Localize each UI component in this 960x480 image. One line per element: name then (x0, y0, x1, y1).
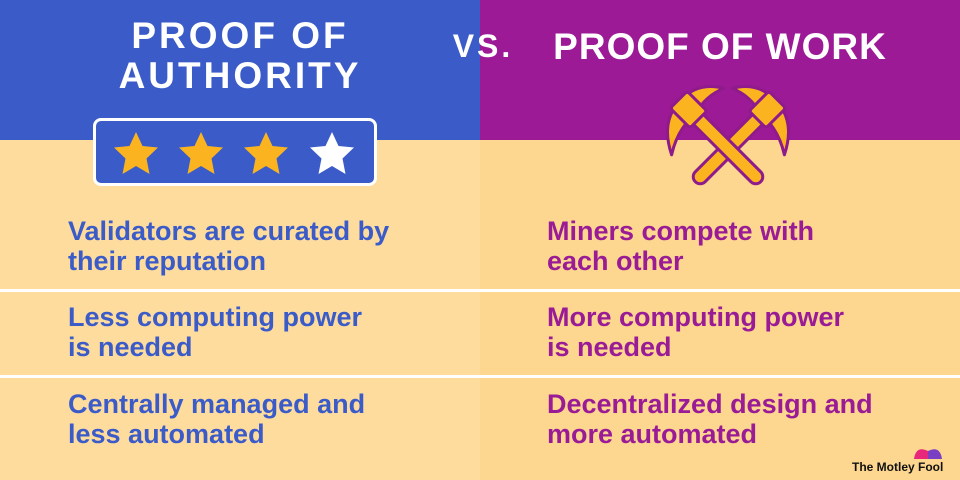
text: left row 1: Validators are curated by (68, 216, 389, 246)
icon: crossed pickaxes (666, 85, 790, 186)
title: proof of authority: PROOF OF (131, 15, 349, 56)
title: proof of authority (119, 15, 361, 96)
text: left row 3: Centrally managed and (68, 389, 365, 419)
text: right row 2: More computing power (547, 302, 844, 332)
text: right row 1: each other (547, 246, 684, 276)
text: left row 1 (68, 216, 389, 276)
text: right row 1 (547, 216, 814, 276)
text: left row 1: their reputation (68, 246, 266, 276)
logo: the motley fool: The Motley Fool (852, 460, 943, 474)
title: vs: VS. (453, 28, 513, 64)
text: left row 2: Less computing power (68, 302, 362, 332)
text: right row 2: is needed (547, 332, 672, 362)
text: left row 3: less automated (68, 419, 265, 449)
text: right row 3 (547, 389, 873, 449)
text: left row 3 (68, 389, 365, 449)
text: left row 2: is needed (68, 332, 193, 362)
text: right row 2 (547, 302, 844, 362)
panel: right header (480, 0, 960, 140)
text: left row 2 (68, 302, 362, 362)
title: proof of authority: AUTHORITY (119, 55, 361, 96)
title: proof of work: PROOF OF WORK (553, 26, 887, 67)
text: right row 1: Miners compete with (547, 216, 814, 246)
icon: star rating box (93, 118, 377, 186)
panel: right body (480, 140, 960, 480)
panel: left header (0, 0, 480, 140)
text: right row 3: more automated (547, 419, 757, 449)
logo: the motley fool (852, 449, 943, 474)
text: right row 3: Decentralized design and (547, 389, 873, 419)
